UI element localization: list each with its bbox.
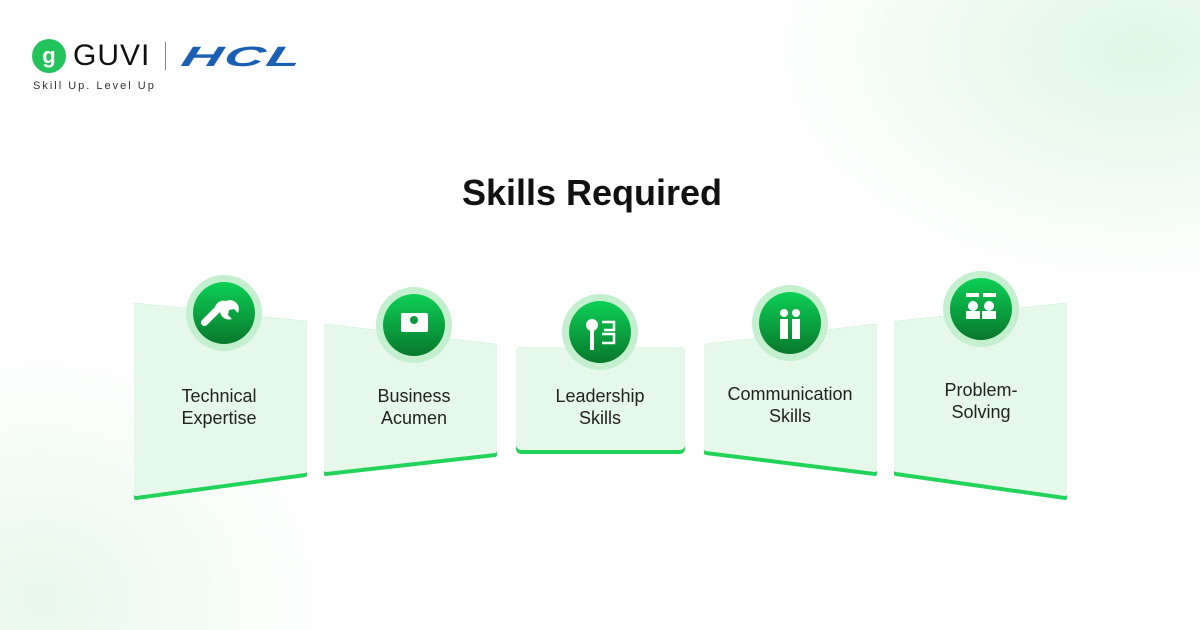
icon: two heads with bubbles xyxy=(966,293,996,319)
card: Technical Expertise: Expertise xyxy=(181,408,257,428)
card: Leadership Skills: Skills xyxy=(579,408,621,428)
card: Technical Expertise xyxy=(136,275,305,498)
title: Skills Required xyxy=(462,172,722,213)
card: Technical Expertise: Technical xyxy=(181,386,257,406)
icon: two people xyxy=(780,309,800,339)
icon: certificate xyxy=(401,313,428,332)
card: Problem-Solving xyxy=(896,271,1065,498)
card: Communication Skills: Communication xyxy=(727,384,853,404)
card: Leadership Skills xyxy=(516,294,685,454)
card: Business Acumen: Acumen xyxy=(381,408,447,428)
card: Problem-Solving: Problem- xyxy=(944,380,1018,400)
card: Communication Skills xyxy=(706,285,875,474)
card: Business Acumen: Business xyxy=(377,386,451,406)
logo: GUVI | HCL xyxy=(32,39,307,92)
text: GUVI: GUVI xyxy=(73,39,150,72)
card: Problem-Solving: Solving xyxy=(951,402,1011,422)
text: HCL: HCL xyxy=(178,41,307,72)
icon: key xyxy=(586,319,614,350)
card: Communication Skills: Skills xyxy=(769,406,811,426)
icon: guvi circle xyxy=(32,39,66,73)
card: Business Acumen xyxy=(326,287,495,474)
card: Leadership Skills: Leadership xyxy=(555,386,645,406)
icon: guvi circle: g xyxy=(42,43,56,68)
icon: wrench xyxy=(201,300,239,326)
tagline: Skill Up. Level Up xyxy=(33,80,156,92)
